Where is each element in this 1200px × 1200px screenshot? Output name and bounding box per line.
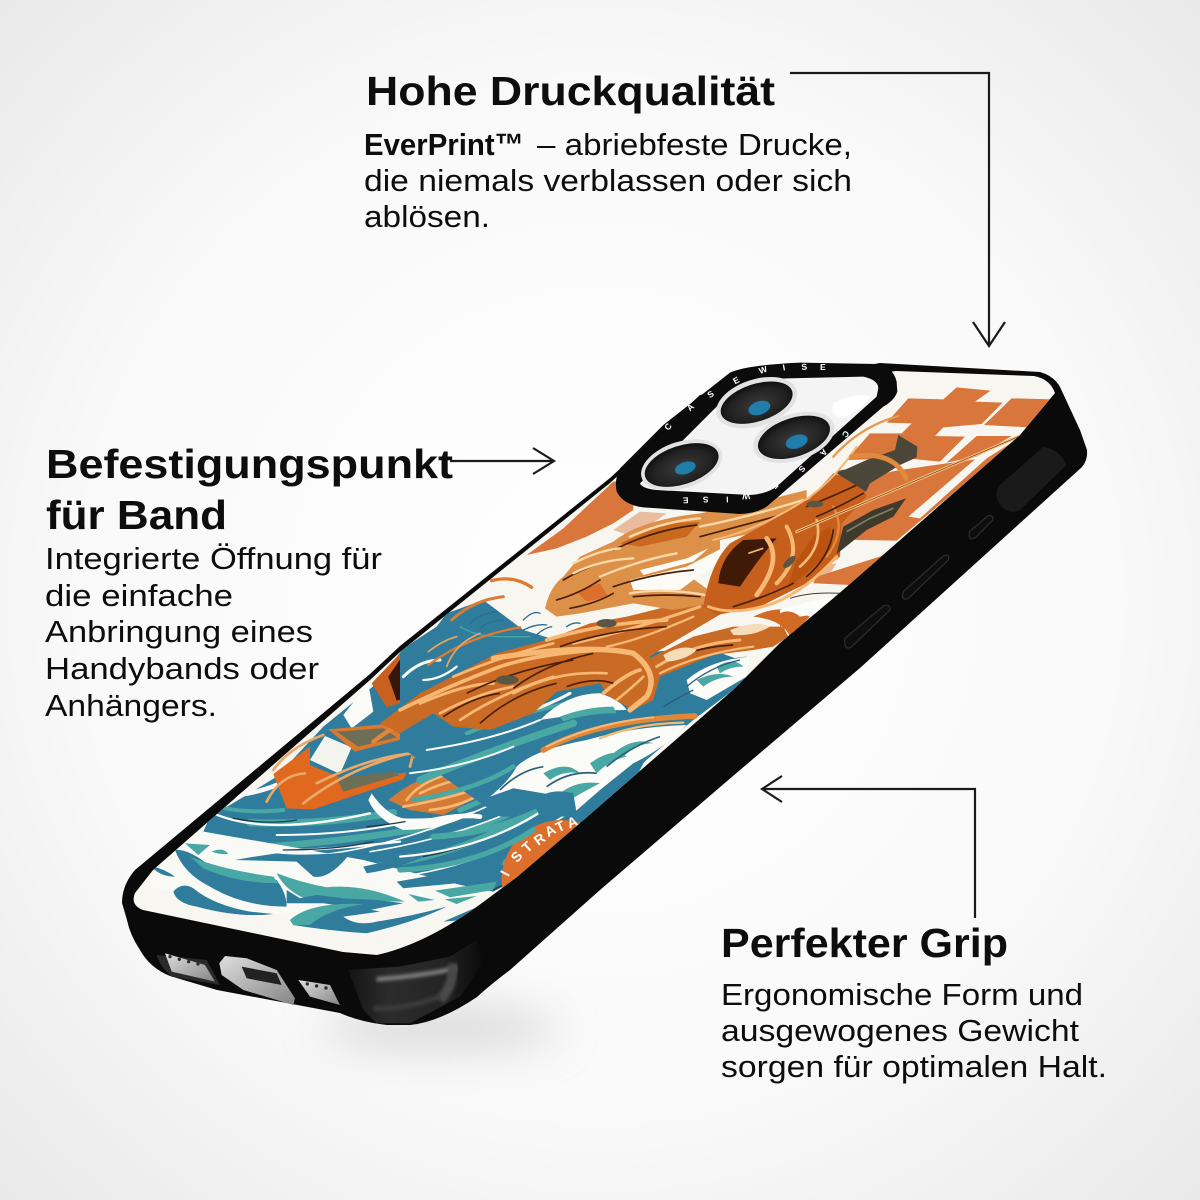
description: strap mount: Anbringung eines xyxy=(45,614,313,649)
white streaks xyxy=(215,782,565,874)
lens left xyxy=(635,430,729,500)
teal streaks xyxy=(223,800,524,866)
dark ink lines xyxy=(233,818,520,890)
description: grip: Ergonomische Form und xyxy=(721,977,1083,1012)
print base xyxy=(134,371,1055,955)
description: grip: ausgewogenes Gewicht xyxy=(721,1013,1079,1048)
heading: strap mount xyxy=(46,441,453,538)
foam crest centre xyxy=(540,693,627,720)
dragon lower body xyxy=(380,602,803,750)
case body xyxy=(122,363,1087,1025)
camera glass xyxy=(640,377,878,495)
brand text on ring lower: CASEWISE xyxy=(682,429,852,506)
orange kanji blocks xyxy=(800,387,1053,585)
description: strap mount xyxy=(45,541,382,723)
dragon body coil xyxy=(703,447,867,615)
description: print quality: – abriebfeste Drucke, xyxy=(537,127,852,162)
bottom left wave blobs xyxy=(152,843,503,933)
description: print quality: ablösen. xyxy=(364,199,490,234)
text block: strap mount xyxy=(45,441,453,723)
speaker left xyxy=(165,953,215,982)
bottom ports xyxy=(157,953,340,1005)
lower tentacle xyxy=(388,775,475,815)
heading: strap mount: Befestigungspunkt xyxy=(46,441,453,487)
foam crest lower xyxy=(490,725,687,813)
phone shadow xyxy=(320,1006,560,1050)
main blue wave xyxy=(203,600,740,892)
description: print quality: EverPrint™ xyxy=(364,127,524,162)
foam crest right xyxy=(687,657,750,700)
camera ring xyxy=(616,363,897,514)
charging port xyxy=(219,956,295,1005)
white wave band xyxy=(368,793,478,830)
white wave lines xyxy=(400,660,570,857)
orange sun band xyxy=(527,480,667,555)
description: strap mount: die einfache xyxy=(45,578,233,613)
waves xyxy=(143,600,740,940)
brand text on ring: CASEWISE xyxy=(662,362,826,432)
arrow: strap mount xyxy=(450,448,554,474)
description: strap mount: Handybands oder xyxy=(45,651,319,686)
dragon head xyxy=(545,490,807,617)
white sea at left xyxy=(203,832,464,886)
text block: print quality xyxy=(364,68,852,234)
boat xyxy=(265,724,416,810)
heading: print quality: Hohe Druckqualität xyxy=(366,68,775,114)
blue wave mid xyxy=(400,650,747,817)
spray on white xyxy=(460,612,580,637)
corner shine xyxy=(348,940,483,1023)
side buttons and volume xyxy=(845,447,1067,648)
arrow: grip xyxy=(762,776,975,918)
description: strap mount: Anhängers. xyxy=(45,688,217,723)
upper right waves, noodles and foam xyxy=(380,490,807,870)
teal bands xyxy=(400,703,573,870)
lens top xyxy=(710,367,804,438)
arrow: print quality xyxy=(790,73,1005,346)
description: print quality xyxy=(364,127,852,234)
sticker badge: ISTRATA xyxy=(497,813,580,879)
speaker right xyxy=(298,980,340,1005)
heading: strap mount: für Band xyxy=(46,492,227,538)
description: grip xyxy=(721,977,1107,1084)
loose noodles xyxy=(428,579,532,667)
heading: grip: Perfekter Grip xyxy=(721,920,1008,966)
description: strap mount: Integrierte Öffnung für xyxy=(45,541,382,576)
brown sail xyxy=(343,650,404,728)
camera module xyxy=(616,362,897,514)
printed artwork xyxy=(134,371,1055,955)
phone case with illustration xyxy=(100,350,1100,1025)
lens right xyxy=(747,402,841,472)
tail claws and whiskers xyxy=(780,416,1020,633)
text block: grip xyxy=(721,920,1107,1084)
description: grip: sorgen für optimalen Halt. xyxy=(721,1049,1107,1084)
description: print quality: die niemals verblassen oder sich xyxy=(364,163,852,198)
